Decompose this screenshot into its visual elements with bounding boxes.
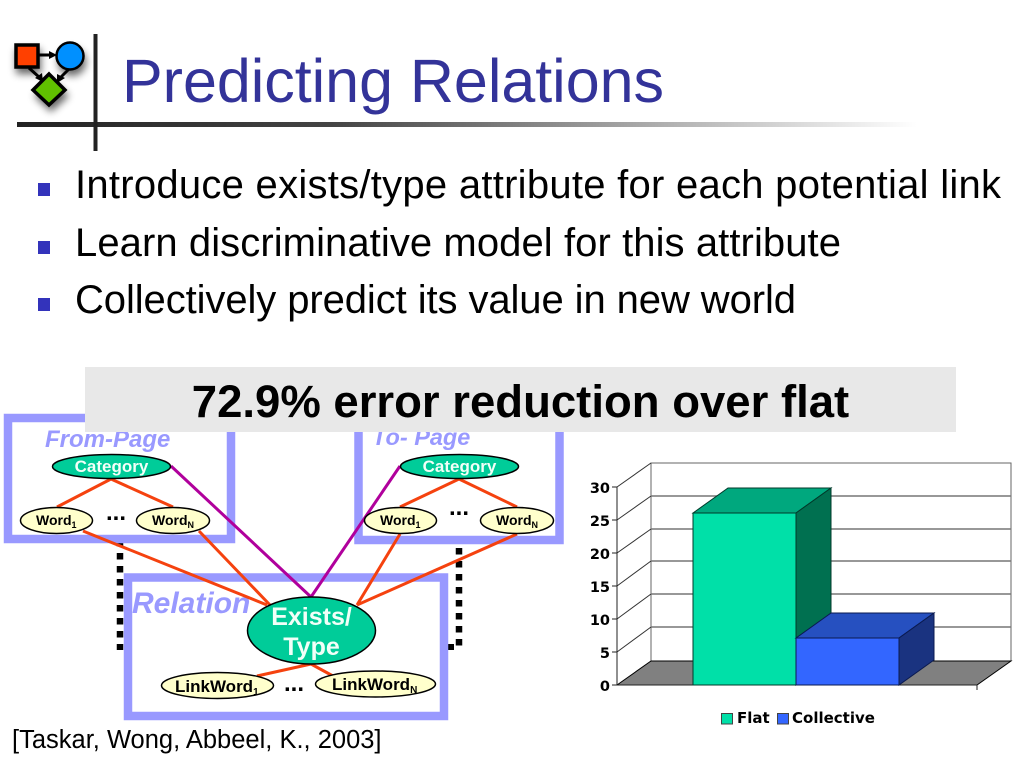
node: Category (From-Page): Category: [75, 457, 149, 476]
callout: error reduction banner: [85, 367, 956, 432]
panel: From-Page box: [8, 418, 231, 539]
ellipsis: From-Page words: ...: [106, 499, 126, 526]
ellipsis: link words: ...: [284, 670, 304, 697]
panel: To-Page box: [358, 418, 560, 540]
node: WordN (To-Page): Word: [496, 512, 532, 528]
bar chart: flat vs collective: [590, 463, 1011, 727]
bullet list: [38, 163, 1002, 322]
node: Category (To-Page): Category: [423, 457, 497, 476]
legend: Collective: [792, 709, 875, 727]
node: Exists/Type: Type: [283, 633, 340, 661]
bullet list: Learn discriminative model for this attribute: [75, 221, 841, 265]
node: LinkWordN: [316, 671, 436, 697]
bar: Flat: [693, 488, 831, 685]
y axis labels: 30: [590, 481, 610, 497]
y axis labels: 0: [600, 679, 610, 695]
ellipsis: To-Page words: ...: [449, 494, 469, 521]
panel: Relation box: [128, 578, 444, 716]
bullet list: Collectively predict its value in new world: [75, 278, 796, 322]
node: Word1 (To-Page): [364, 508, 436, 534]
panel: From-Page box: From-Page: [45, 426, 170, 453]
icon: logo with square, circle and diamond: [16, 42, 86, 112]
title rule lines: [17, 34, 917, 151]
chart walls and floor: [612, 463, 1011, 690]
node: LinkWord1: 1: [253, 687, 259, 698]
y axis labels: 20: [590, 547, 610, 563]
node: LinkWord1: [162, 672, 274, 698]
legend: Flat: [737, 709, 770, 727]
node: Exists/Type: [248, 597, 376, 664]
node: WordN (To-Page): [480, 508, 554, 534]
bullet list: Introduce exists/type attribute for each potential link: [75, 163, 1002, 207]
node: LinkWordN: N: [410, 685, 417, 696]
panel: To-Page box: To- Page: [372, 424, 470, 450]
y axis labels: [590, 481, 610, 695]
y axis labels: 10: [590, 613, 610, 629]
y axis labels: 25: [590, 514, 610, 530]
node: WordN (From-Page): N: [188, 520, 194, 530]
node: WordN (From-Page): Word: [152, 512, 188, 528]
node: Word1 (From-Page): [20, 508, 92, 534]
node: LinkWordN: LinkWord: [332, 675, 410, 694]
bar: Collective: [796, 613, 934, 685]
callout: error reduction banner: 72.9% error reduction over flat: [192, 376, 849, 427]
node: Word1 (To-Page): 1: [416, 520, 421, 530]
dotted connector: right: [448, 548, 459, 650]
title: Predicting Relations: [122, 47, 664, 115]
y axis labels: 5: [600, 646, 610, 662]
link lines between nodes: [57, 466, 517, 676]
citation: [Taskar, Wong, Abbeel, K., 2003]: [12, 726, 382, 754]
node: LinkWord1: LinkWord: [175, 677, 253, 696]
node: Word1 (To-Page): Word: [380, 512, 416, 528]
node: WordN (To-Page): N: [532, 520, 538, 530]
panel: Relation box: Relation: [132, 587, 250, 620]
node: Exists/Type: Exists/: [271, 603, 352, 631]
node: Category (From-Page): [52, 454, 170, 478]
node: WordN (From-Page): [136, 508, 210, 534]
node: Category (To-Page): [400, 454, 518, 478]
legend: [722, 709, 875, 727]
dotted connector: left: [117, 540, 123, 650]
node: Word1 (From-Page): Word: [36, 512, 72, 528]
y axis labels: 15: [590, 580, 610, 596]
node: Word1 (From-Page): 1: [72, 520, 77, 530]
